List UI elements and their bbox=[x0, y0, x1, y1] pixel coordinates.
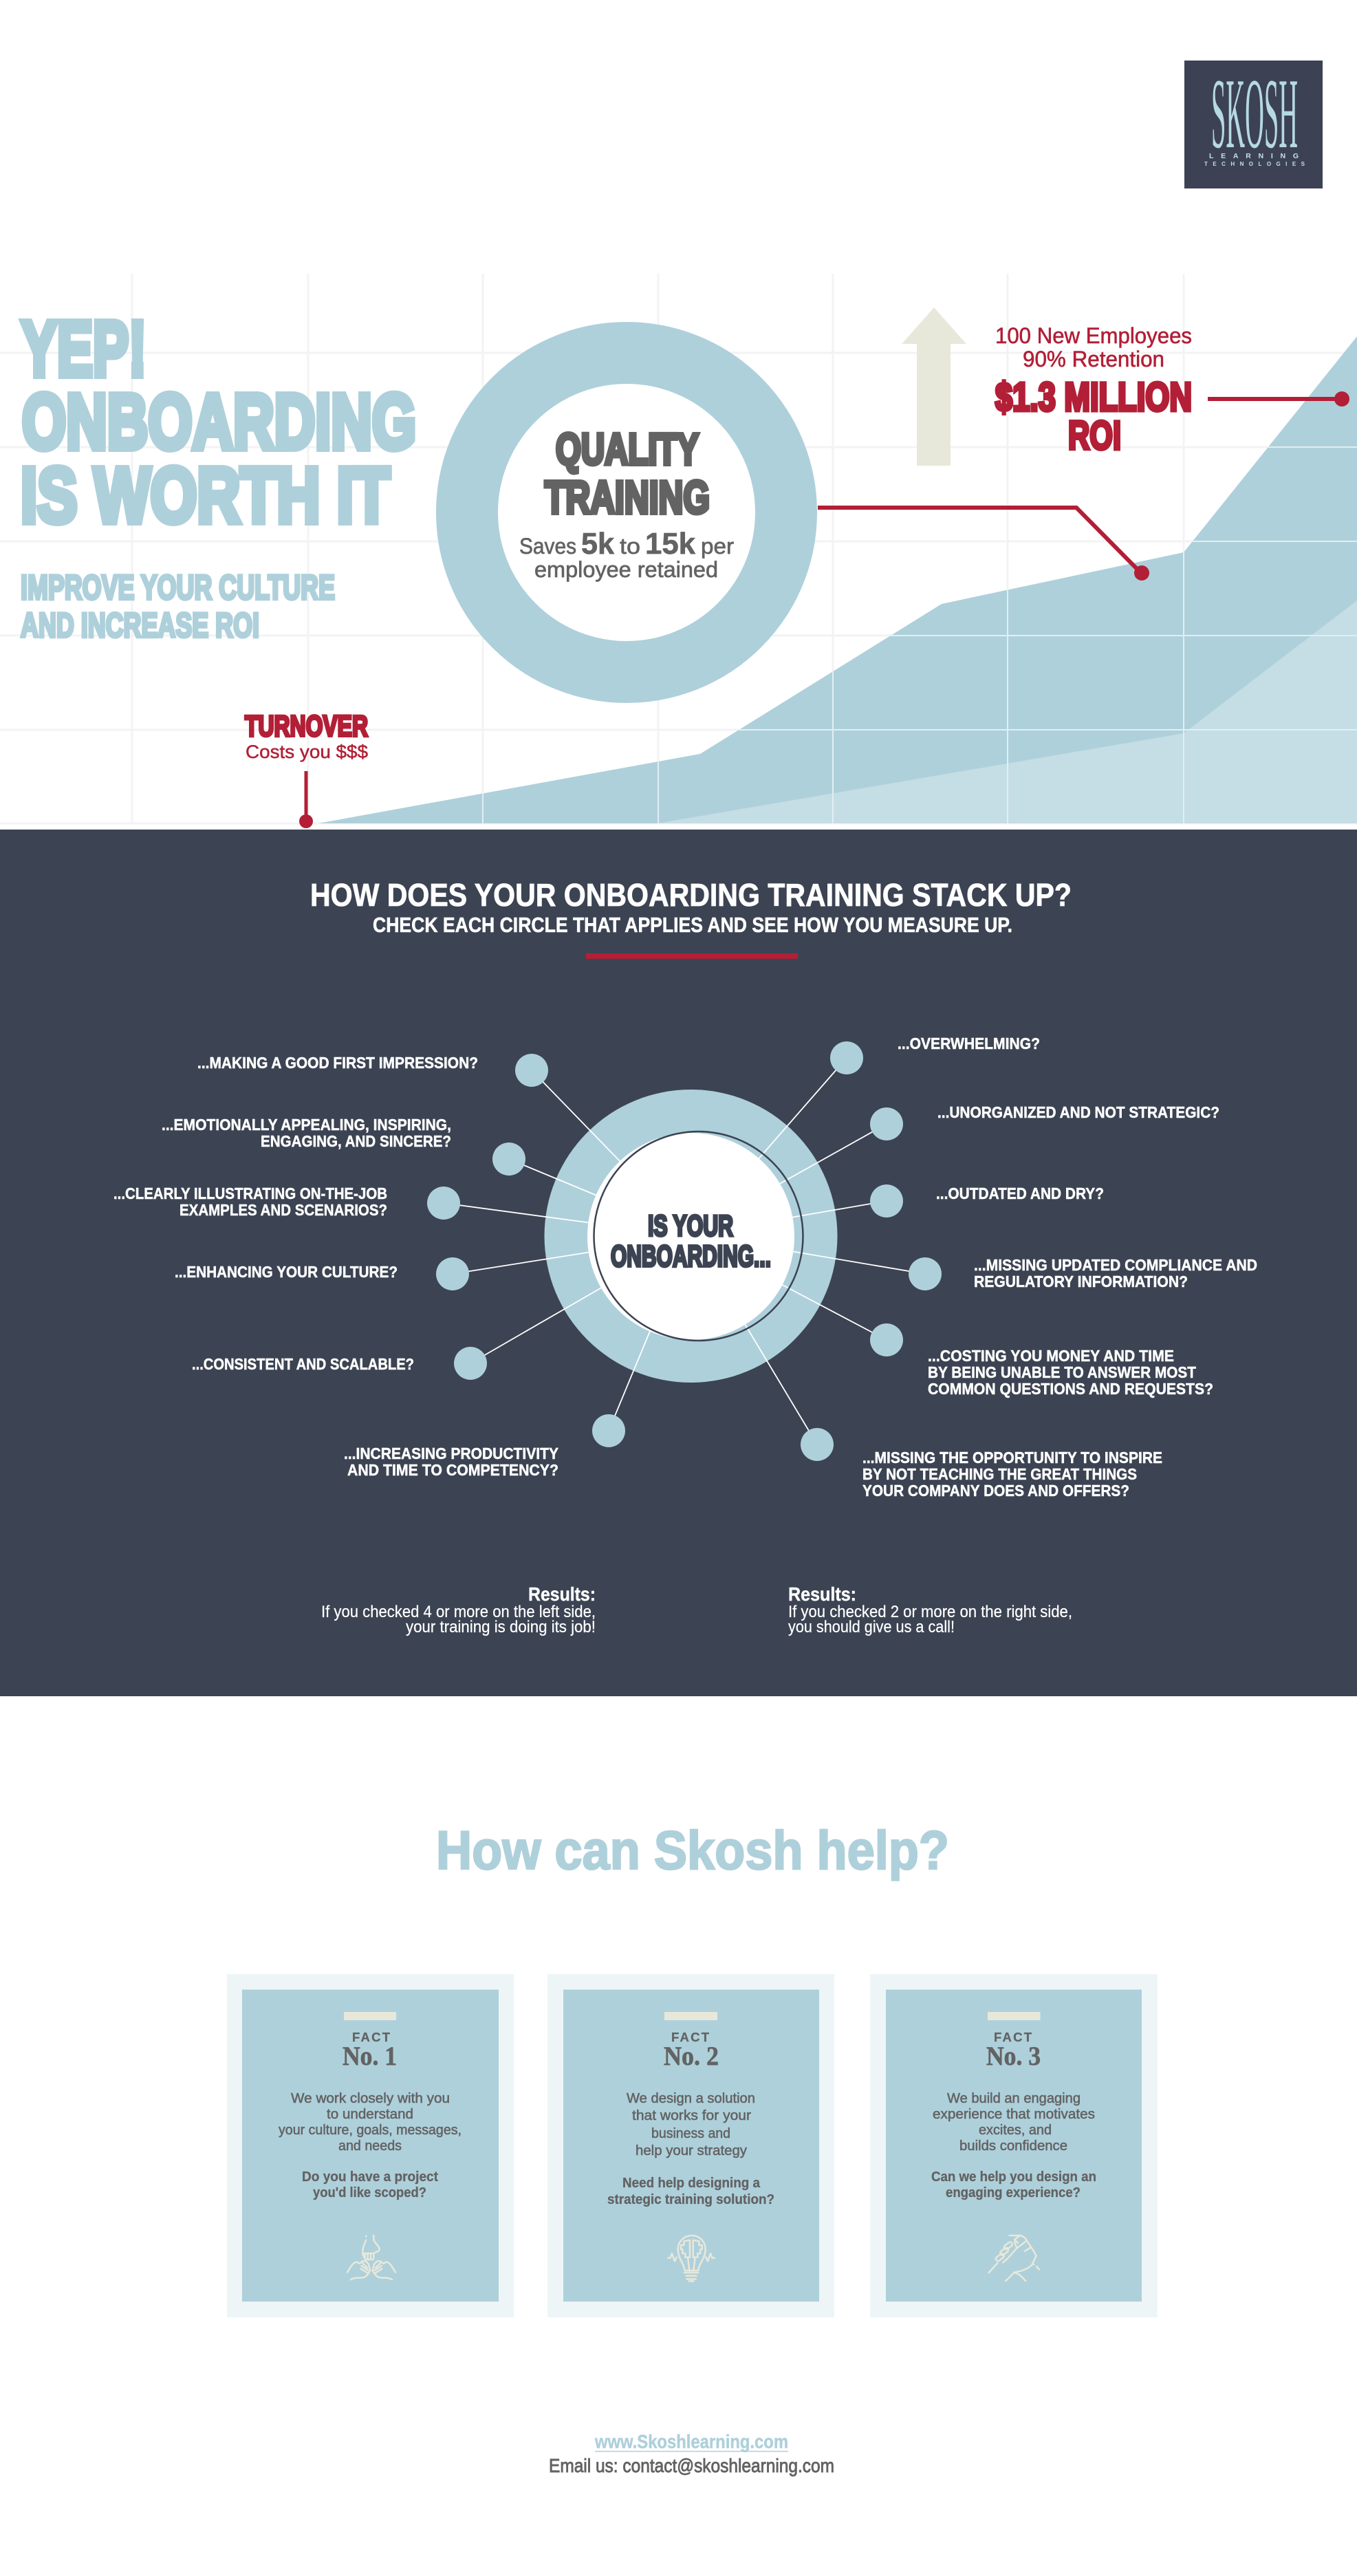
callout: turnover: Costs you $$$ bbox=[246, 742, 368, 762]
heading: how does your onboarding stack up: HOW DOES YOUR ONBOARDING TRAINING STACK UP? bbox=[310, 877, 1072, 913]
panel: fact 1: to understand bbox=[327, 2106, 413, 2122]
panel: fact 2: Need help designing a bbox=[622, 2175, 761, 2191]
labels: left side statements: AND TIME TO COMPETENCY? bbox=[347, 1461, 558, 1479]
panel: fact 2: strategic training solution? bbox=[607, 2191, 774, 2207]
panel: fact 1: and needs bbox=[338, 2138, 402, 2154]
checkboxes: left and right circles bbox=[427, 1041, 942, 1461]
icon: light bulb with brain bbox=[668, 2236, 715, 2281]
callout: 100 new employees ROI: $1.3 MILLION bbox=[995, 375, 1192, 420]
panel: fact 3: engaging experience? bbox=[946, 2185, 1081, 2200]
callout: 100 new employees ROI: 100 New Employees bbox=[995, 323, 1192, 348]
labels: left side statements: ENGAGING, AND SINCERE? bbox=[261, 1132, 451, 1150]
panel: fact 3: No. 3 bbox=[986, 2042, 1041, 2071]
title: Yep! Onboarding is worth it: IS WORTH IT bbox=[21, 452, 390, 539]
panel: fact 3: Can we help you design an bbox=[931, 2169, 1096, 2185]
donut: quality training: QUALITY bbox=[556, 424, 699, 474]
text block: results right bbox=[788, 1583, 1072, 1636]
labels: right side statements: BY NOT TEACHING THE GREAT THINGS bbox=[862, 1465, 1137, 1483]
text block: results left: your training is doing its job! bbox=[406, 1618, 596, 1636]
labels: right side statements: ...UNORGANIZED AND NOT STRATEGIC? bbox=[937, 1103, 1219, 1121]
arrow: up bbox=[902, 307, 966, 466]
icon: clasped hands bbox=[989, 2236, 1039, 2281]
labels: left side statements: ...INCREASING PRODUCTIVITY bbox=[344, 1444, 558, 1462]
panel: fact 1: We work closely with you bbox=[291, 2090, 450, 2106]
donut: quality training: 15k bbox=[645, 527, 696, 561]
labels: left side statements: ...CLEARLY ILLUSTRATING ON-THE-JOB bbox=[113, 1184, 387, 1202]
panel: fact 3: We build an engaging bbox=[947, 2090, 1081, 2106]
panel: fact 2: that works for your bbox=[632, 2108, 751, 2123]
panel: fact 3 bbox=[870, 1974, 1158, 2317]
wheel: is your onboarding bbox=[444, 1058, 925, 1444]
labels: right side statements: ...OUTDATED AND DRY? bbox=[936, 1184, 1104, 1202]
subtitle: improve your culture and increase ROI: AND INCREASE ROI bbox=[21, 606, 259, 645]
logo: Skosh Learning Technologies bbox=[1184, 58, 1323, 188]
panel: fact 2: help your strategy bbox=[636, 2143, 748, 2158]
panel: fact 2: business and bbox=[651, 2125, 730, 2141]
callout: turnover bbox=[245, 710, 368, 828]
panel: fact 1: No. 1 bbox=[343, 2042, 397, 2071]
donut: quality training: to bbox=[620, 534, 640, 559]
text block: results left: Results: bbox=[528, 1583, 596, 1605]
text block: results left: If you checked 4 or more on the left side, bbox=[321, 1603, 596, 1621]
labels: left side statements: ...MAKING A GOOD FIRST IMPRESSION? bbox=[197, 1054, 478, 1072]
panel: fact 2: No. 2 bbox=[664, 2042, 719, 2071]
panel: fact 1 bbox=[227, 1974, 514, 2317]
text block: results right: If you checked 2 or more on the right side, bbox=[788, 1603, 1072, 1621]
heading: how can Skosh help: How can Skosh help? bbox=[436, 1819, 949, 1881]
logo: Skosh Learning Technologies: TECHNOLOGIES bbox=[1204, 161, 1305, 167]
title: Yep! Onboarding is worth it bbox=[21, 305, 416, 539]
labels: left side statements bbox=[113, 1054, 558, 1479]
panel: fact 1: you'd like scoped? bbox=[313, 2185, 426, 2200]
icon: three hands bbox=[347, 2236, 395, 2280]
panel: fact 3: excites, and bbox=[979, 2122, 1052, 2138]
labels: left side statements: ...CONSISTENT AND SCALABLE? bbox=[192, 1355, 414, 1373]
heading: how does your onboarding stack up bbox=[310, 877, 1072, 959]
callout: 100 new employees ROI: 90% Retention bbox=[1023, 347, 1164, 371]
labels: left side statements: ...ENHANCING YOUR CULTURE? bbox=[175, 1263, 398, 1281]
title: Yep! Onboarding is worth it: YEP! bbox=[21, 305, 146, 392]
panel: hero growth chart bbox=[0, 274, 1357, 823]
panel: fact 1: Do you have a project bbox=[302, 2169, 438, 2185]
panel: fact 2: We design a solution bbox=[627, 2090, 755, 2106]
heading: how does your onboarding stack up: CHECK EACH CIRCLE THAT APPLIES AND SEE HOW YOU MEASURE UP. bbox=[373, 913, 1012, 937]
connector: donut to chart bbox=[818, 508, 1149, 581]
callout: turnover: TURNOVER bbox=[245, 710, 368, 743]
panel: fact 2 bbox=[547, 1974, 834, 2317]
donut: quality training bbox=[467, 353, 786, 672]
labels: right side statements bbox=[862, 1035, 1257, 1500]
labels: left side statements: ...EMOTIONALLY APPEALING, INSPIRING, bbox=[162, 1116, 451, 1134]
footer: website and email: www.Skoshlearning.com bbox=[594, 2431, 788, 2452]
title: Yep! Onboarding is worth it: ONBOARDING bbox=[22, 378, 416, 465]
subtitle: improve your culture and increase ROI: IMPROVE YOUR CULTURE bbox=[21, 568, 335, 607]
donut: quality training: Saves bbox=[519, 534, 576, 559]
panel: fact 3: experience that motivates bbox=[933, 2106, 1095, 2122]
footer: website and email bbox=[549, 2431, 834, 2476]
labels: right side statements: ...MISSING UPDATED COMPLIANCE AND bbox=[974, 1256, 1257, 1274]
wheel: is your onboarding: ONBOARDING... bbox=[611, 1240, 771, 1273]
labels: right side statements: ...COSTING YOU MONEY AND TIME bbox=[928, 1347, 1174, 1365]
labels: right side statements: YOUR COMPANY DOES AND OFFERS? bbox=[862, 1482, 1129, 1500]
text block: results right: Results: bbox=[788, 1583, 856, 1605]
footer: website and email: Email us: contact@skoshlearning.com bbox=[549, 2455, 834, 2476]
panel: stack up checklist bbox=[0, 830, 1357, 1696]
donut: quality training: 5k bbox=[581, 527, 615, 561]
connector: ROI to chart bbox=[1208, 391, 1349, 407]
labels: right side statements: ...MISSING THE OPPORTUNITY TO INSPIRE bbox=[862, 1449, 1162, 1466]
logo: Skosh Learning Technologies: LEARNING bbox=[1209, 152, 1299, 160]
panel: fact 3: FACT bbox=[994, 2030, 1032, 2044]
panel: fact 3: builds confidence bbox=[959, 2138, 1067, 2154]
labels: right side statements: REGULATORY INFORMATION? bbox=[974, 1273, 1188, 1290]
labels: left side statements: EXAMPLES AND SCENARIOS? bbox=[180, 1201, 387, 1219]
callout: 100 new employees ROI: ROI bbox=[1068, 413, 1121, 458]
wheel: is your onboarding: IS YOUR bbox=[648, 1209, 733, 1242]
donut: quality training: TRAINING bbox=[545, 472, 710, 523]
labels: right side statements: BY BEING UNABLE TO ANSWER MOST bbox=[928, 1363, 1196, 1381]
panel: fact 2: FACT bbox=[671, 2030, 710, 2044]
text block: results left bbox=[321, 1583, 596, 1636]
callout: 100 new employees ROI bbox=[995, 323, 1192, 458]
labels: right side statements: ...OVERWHELMING? bbox=[898, 1035, 1040, 1052]
text block: results right: you should give us a call! bbox=[788, 1618, 955, 1636]
panel: fact 1: FACT bbox=[352, 2030, 391, 2044]
labels: right side statements: COMMON QUESTIONS AND REQUESTS? bbox=[928, 1380, 1213, 1398]
subtitle: improve your culture and increase ROI bbox=[21, 568, 335, 645]
donut: quality training: per bbox=[701, 534, 734, 559]
panel: fact 1: your culture, goals, messages, bbox=[279, 2122, 462, 2138]
donut: quality training: employee retained bbox=[534, 557, 718, 582]
